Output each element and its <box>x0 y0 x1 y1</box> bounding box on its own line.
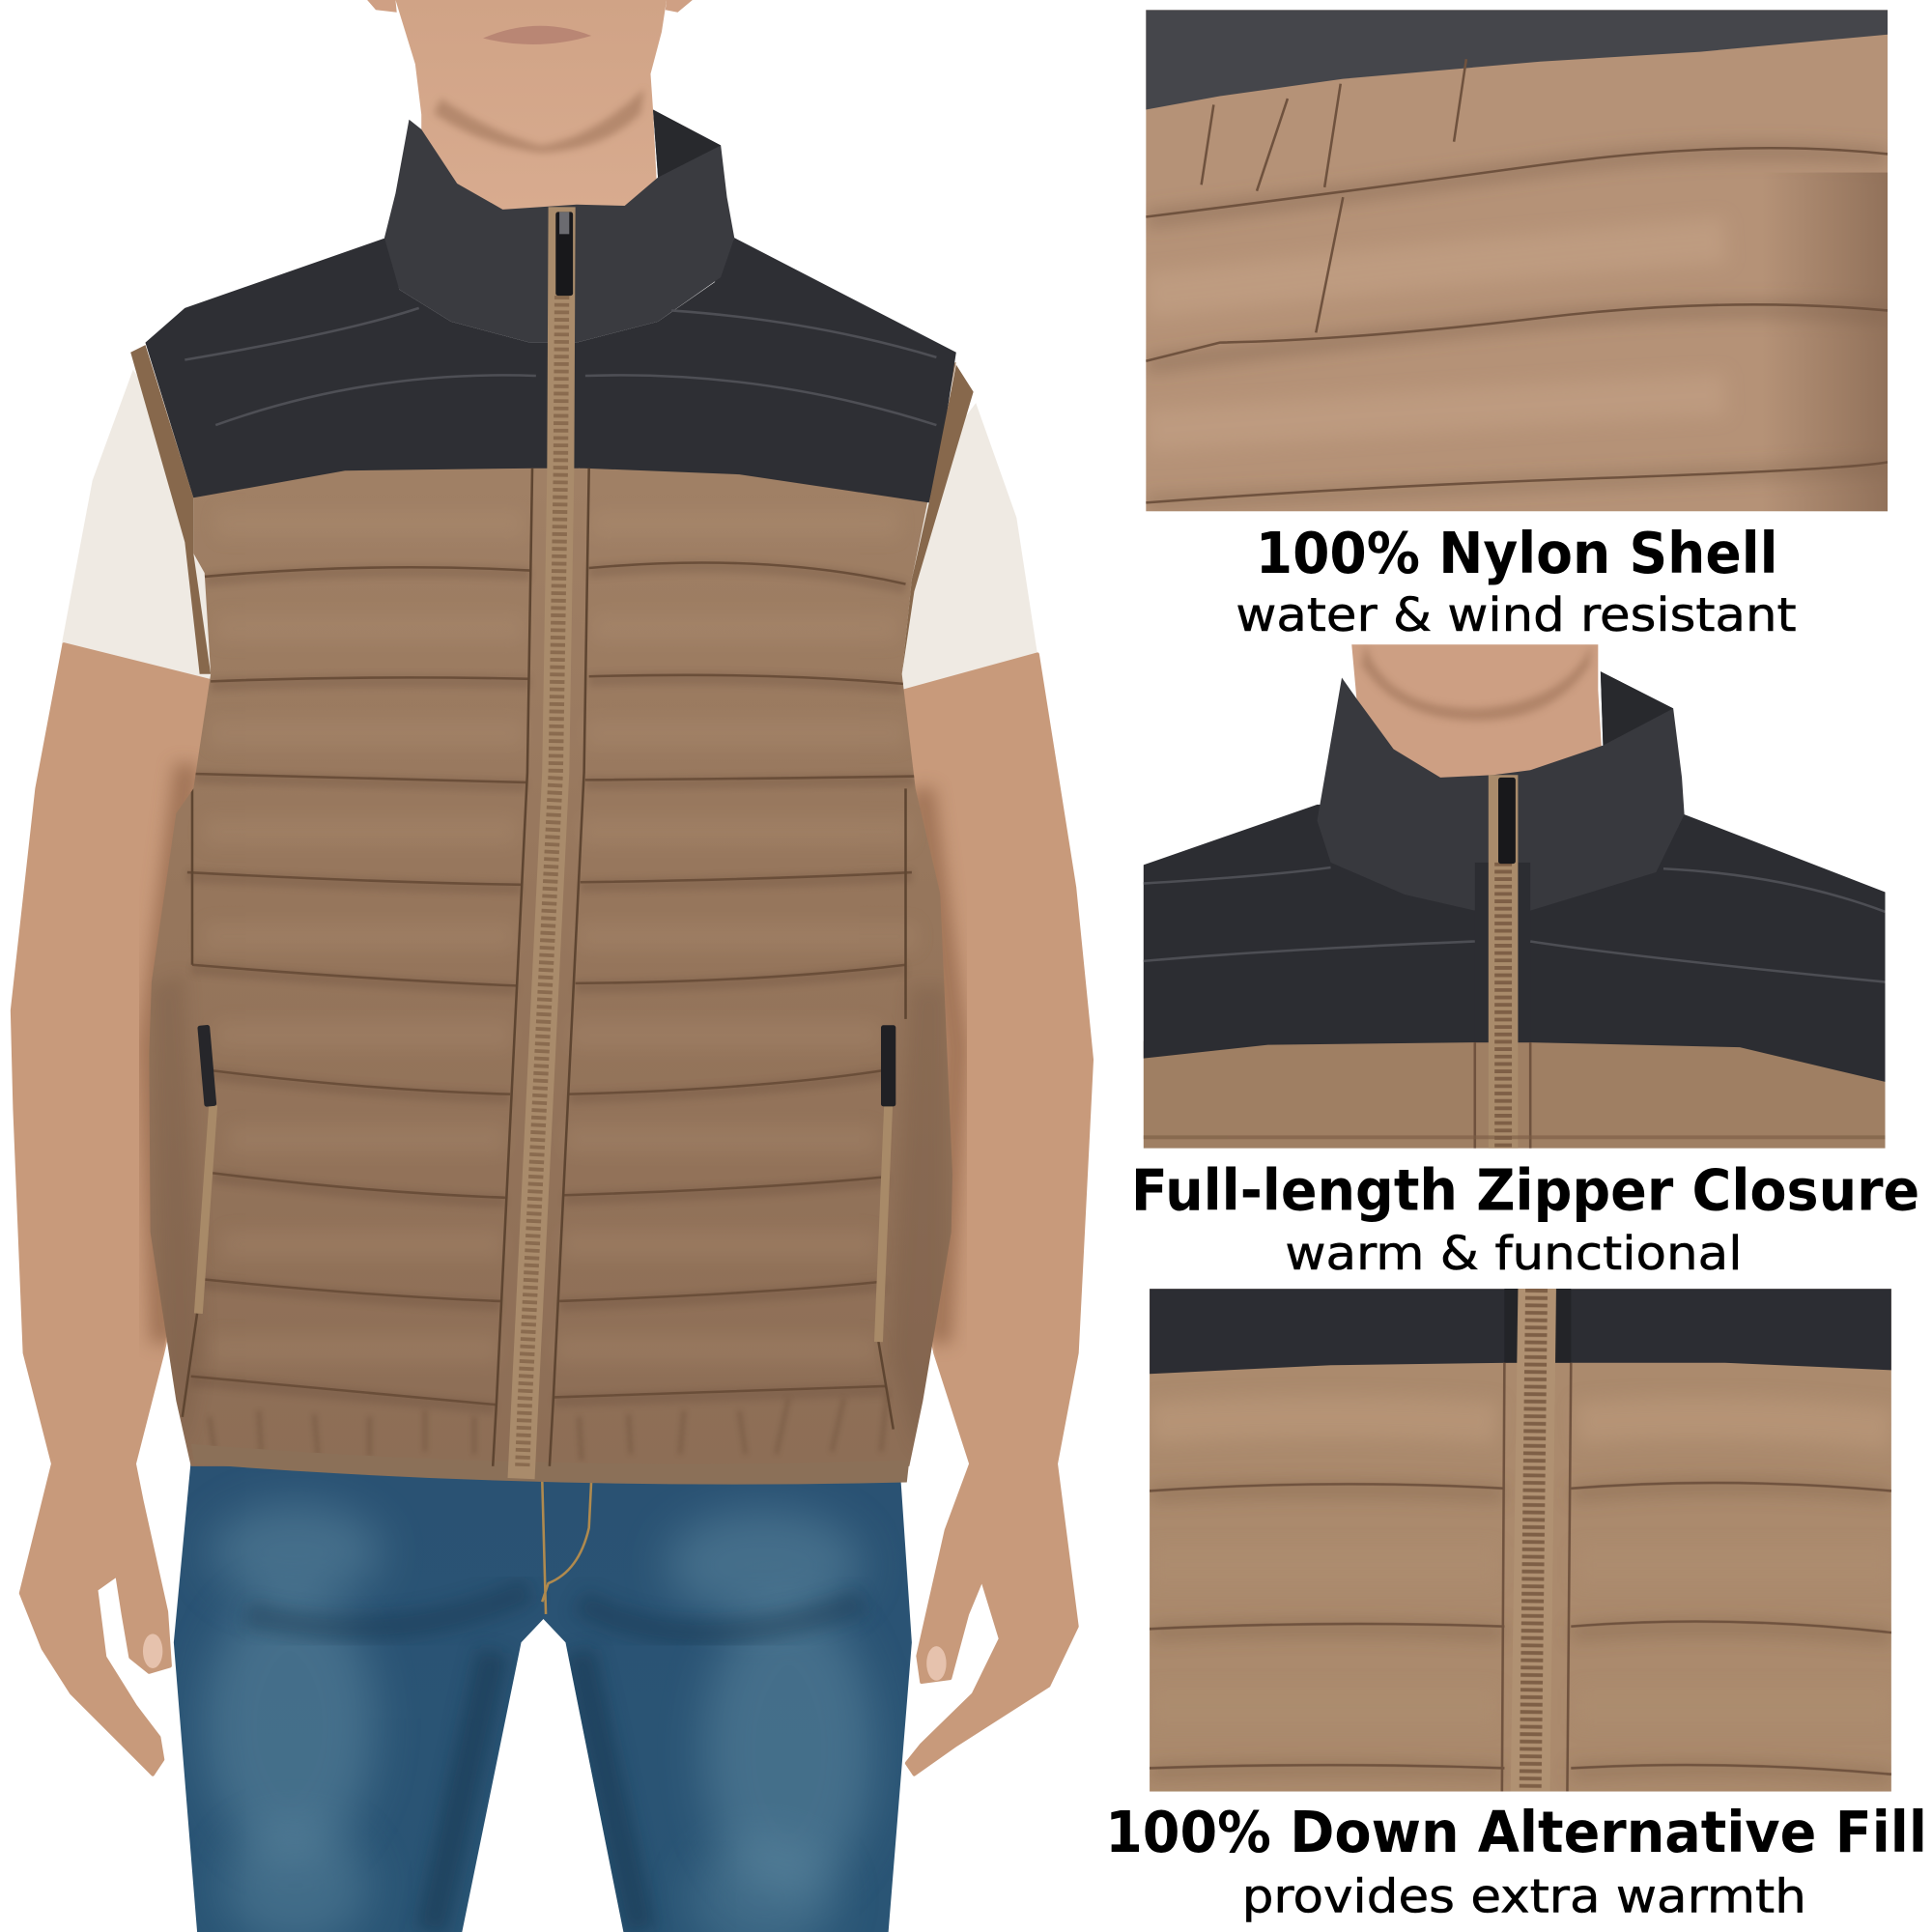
black yoke strip <box>1146 10 1888 110</box>
zipper teeth <box>523 296 562 1466</box>
text: water & wind resistant: water & wind resistant <box>1236 588 1797 642</box>
jeans <box>174 1460 912 1932</box>
black yoke strip <box>1150 1289 1891 1374</box>
t-shirt right sleeve <box>863 403 1037 708</box>
zipper pull <box>555 212 573 296</box>
bottom gathers <box>209 1397 888 1458</box>
centre zipper <box>493 207 589 1479</box>
right pocket zipper <box>878 1025 895 1342</box>
right thumb nail <box>926 1646 947 1681</box>
jeans fly stitching <box>542 1479 591 1614</box>
zipper <box>1475 863 1530 1042</box>
lips <box>483 26 591 44</box>
fabric shading <box>1150 1417 1891 1776</box>
vest collar <box>384 110 734 343</box>
chin shadow <box>1361 644 1592 721</box>
vest black shoulder yoke <box>146 237 956 502</box>
left thumb nail <box>143 1634 162 1668</box>
seams <box>1144 867 1886 982</box>
right arm and hand <box>904 652 1094 1776</box>
seams and creases <box>1146 59 1888 502</box>
black yoke <box>1144 805 1886 1082</box>
vest armhole binding <box>130 345 974 674</box>
main photo: man wearing vest <box>13 0 1092 1932</box>
bottom hem <box>191 1444 909 1485</box>
zipper <box>1504 1289 1571 1363</box>
chin shadow <box>434 89 644 153</box>
seams <box>1150 1363 1891 1792</box>
collar inner lining <box>653 110 721 178</box>
vest quilt seams and shading <box>151 308 949 1460</box>
side panel seams <box>183 788 906 1430</box>
placket lines <box>1475 1042 1530 1149</box>
right edge darkening <box>1791 172 1888 512</box>
fabric shading <box>1146 151 1888 502</box>
vest body <box>130 110 974 1485</box>
neck <box>1351 644 1602 788</box>
side panel shading <box>155 983 196 1405</box>
placket seams <box>493 469 589 1466</box>
text: provides extra warmth: provides extra warmth <box>1242 1870 1806 1924</box>
panel: zipper close-up <box>1144 644 1886 1149</box>
panel: down fill close-up <box>1150 1289 1891 1792</box>
left arm and hand <box>10 642 211 1776</box>
ears <box>367 0 693 13</box>
left pocket zipper <box>197 1025 216 1314</box>
collar lining <box>1601 671 1673 746</box>
neck and face <box>367 0 693 234</box>
zipper tape <box>522 207 562 1479</box>
text: warm & functional: warm & functional <box>1285 1227 1743 1281</box>
brown body <box>1144 1041 1886 1149</box>
heading: 100% Nylon Shell: 100% Nylon Shell <box>1256 521 1778 586</box>
t-shirt left sleeve <box>62 370 259 696</box>
collar <box>1318 671 1685 911</box>
panel: nylon shell close-up <box>1146 10 1888 511</box>
